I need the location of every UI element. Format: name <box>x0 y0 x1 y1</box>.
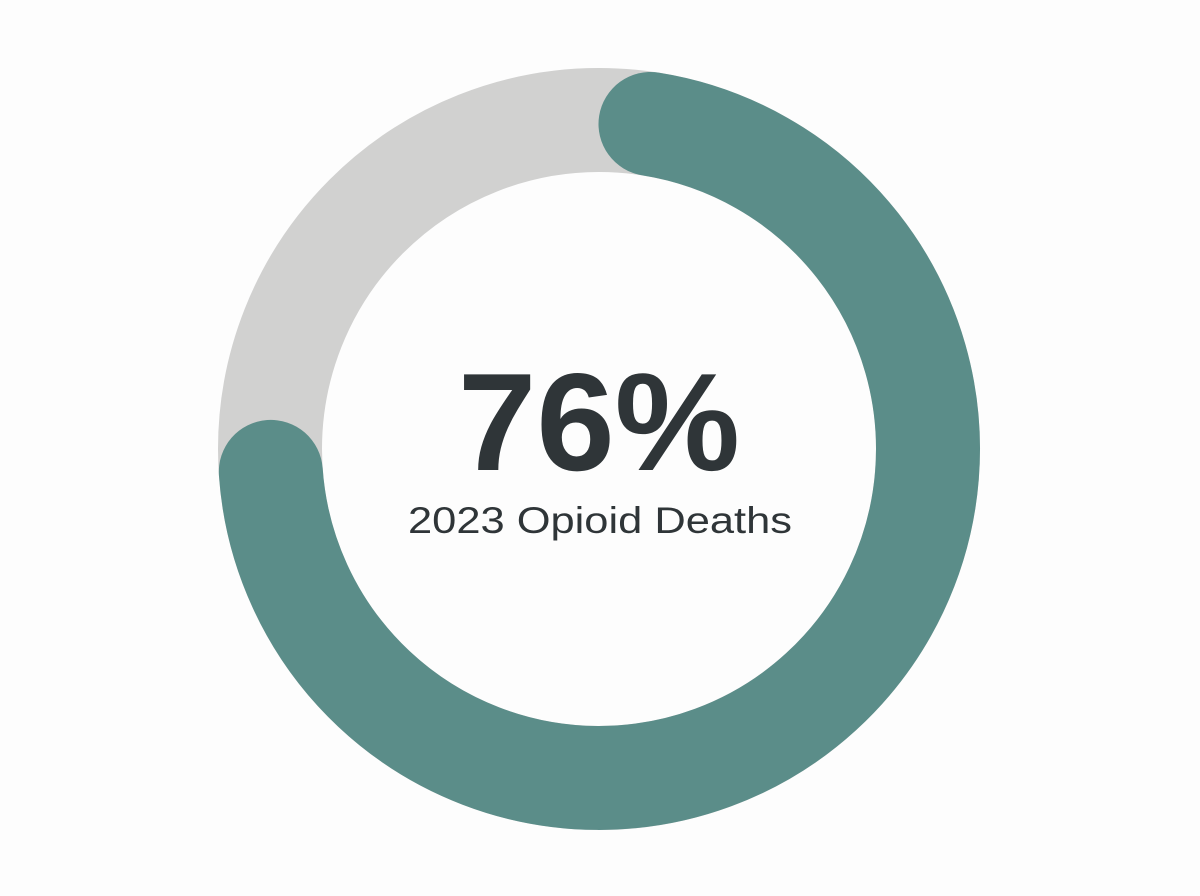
donut arc: 76% <box>271 124 928 778</box>
subtitle: 2023 Opioid Deaths <box>408 500 792 541</box>
donut track (remaining share) <box>270 120 928 778</box>
big value: 76%: 76% <box>458 345 740 500</box>
